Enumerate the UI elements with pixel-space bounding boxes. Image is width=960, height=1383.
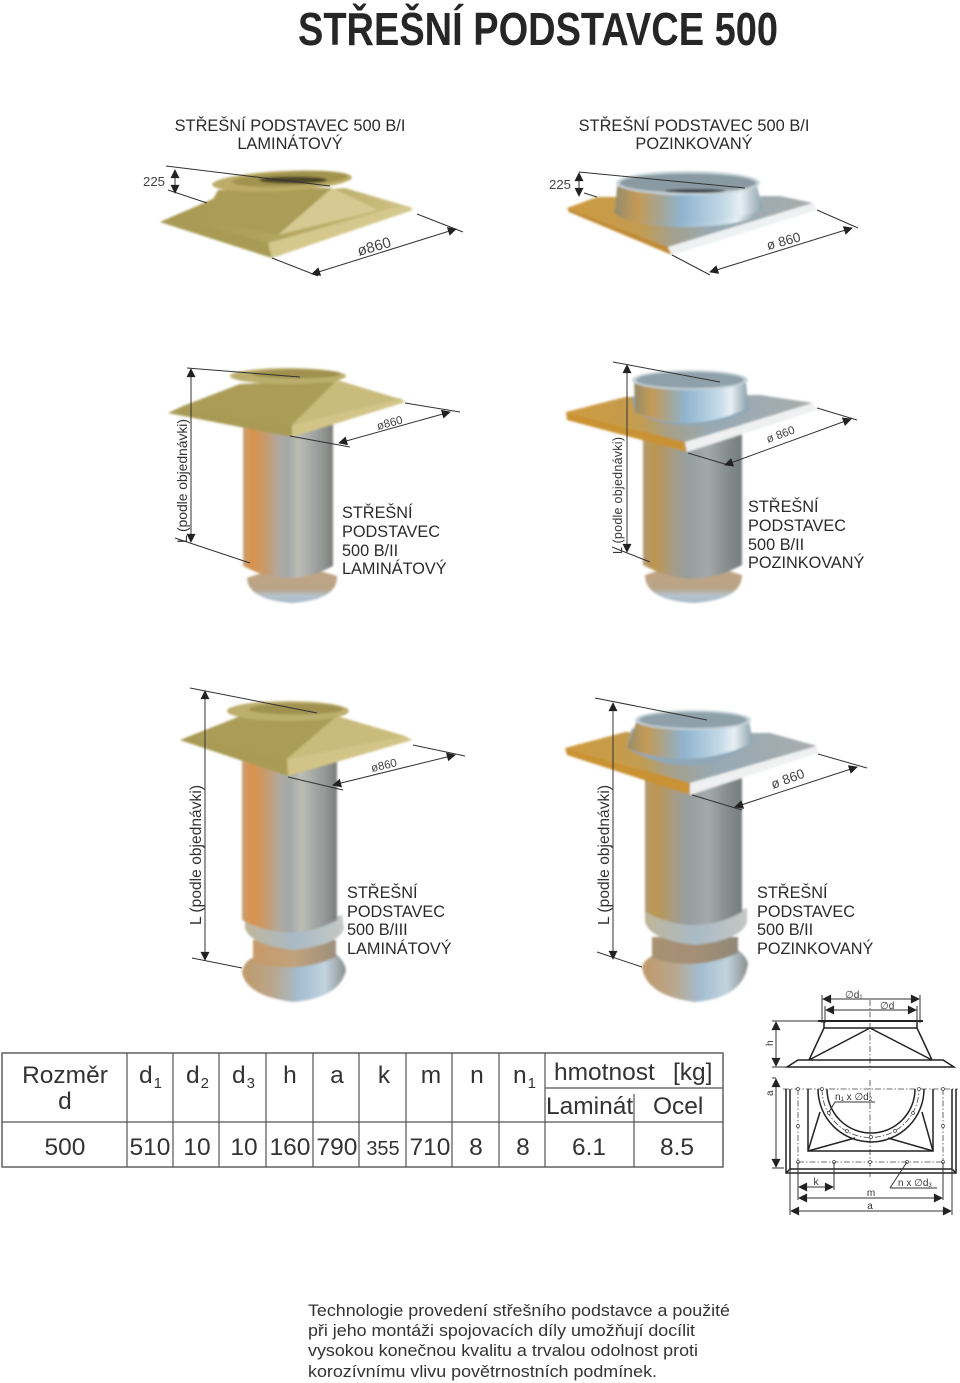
elevation view: ∅d [880, 1001, 894, 1012]
label: PODSTAVEC [757, 903, 855, 921]
dimension: 225: 225 [549, 177, 571, 192]
product: galvanized B/II with collar [565, 698, 874, 1002]
label [347, 883, 452, 958]
table data row: 10 [230, 1134, 258, 1161]
plan view: 2 [869, 1097, 873, 1103]
bottom dimensions: a [867, 1201, 873, 1212]
product: galvanized B/II [566, 362, 865, 603]
product: galvanized base B/I [549, 171, 858, 275]
subtitle: laminated B/I: LAMINÁTOVÝ [237, 134, 343, 153]
plan view: n [835, 1092, 841, 1103]
table data row: 790 [317, 1134, 357, 1161]
label: 500 B/II [748, 536, 804, 554]
bottom dimensions: k [814, 1177, 820, 1188]
dimension: 860: ø860 [355, 234, 393, 260]
label: 500 B/II [757, 921, 813, 939]
elevation view [765, 990, 954, 1070]
table header row: Ocel [653, 1093, 703, 1120]
description paragraph: při jeho montáži spojovacích díly umožňují docílit [308, 1321, 695, 1340]
label: PODSTAVEC [342, 523, 440, 541]
table header row: k [378, 1062, 391, 1089]
label [342, 503, 447, 578]
dimension: 225 [143, 166, 330, 203]
table data row: 710 [410, 1134, 450, 1161]
table header row: m [421, 1062, 441, 1089]
table header row: Rozměr [22, 1062, 108, 1089]
table data row: 10 [183, 1134, 211, 1161]
table header row: Laminát [546, 1093, 633, 1120]
dimension: 860 [290, 403, 460, 447]
table data row: 8 [516, 1134, 530, 1161]
dimension: L: L (podle objednávki) [596, 785, 613, 925]
dimension: 225 [549, 172, 745, 197]
table header row: d [139, 1062, 153, 1089]
bottom dimensions [790, 1162, 952, 1215]
label [748, 497, 865, 572]
dimension: 860: ø860 [376, 415, 404, 433]
label: 500 B/III [347, 921, 408, 939]
table header row: n [513, 1062, 527, 1089]
table header row: 1 [528, 1075, 536, 1092]
table data row [45, 1134, 694, 1161]
table header row: d [232, 1062, 246, 1089]
elevation view: ∅d [845, 990, 859, 1001]
description paragraph [308, 1301, 730, 1381]
elevation view: 1 [859, 995, 863, 1001]
bottom dimensions: m [867, 1188, 875, 1199]
table header row: [kg] [673, 1059, 712, 1086]
table data row: 6.1 [572, 1134, 606, 1161]
subtitle: laminated B/I: STŘEŠNÍ PODSTAVEC 500 B/I [175, 116, 405, 135]
dimension: 860 [692, 754, 867, 810]
table header row: d [58, 1088, 72, 1115]
dimension: 860 [272, 214, 463, 276]
dimension: 860 [288, 745, 465, 790]
dimension: L [174, 368, 300, 563]
label: POZINKOVANÝ [757, 939, 874, 958]
dimension: L [611, 362, 720, 562]
table header row: 1 [154, 1075, 162, 1092]
technical drawing [765, 990, 958, 1215]
dimension: 860: ø 860 [765, 424, 797, 446]
plan view: 1 [841, 1097, 845, 1103]
table header row: h [283, 1062, 297, 1089]
dimension: 225: 225 [143, 174, 165, 189]
description paragraph: vysokou konečnou kvalitu a trvalou odolnost proti [308, 1341, 698, 1360]
title: STŘEŠNÍ PODSTAVCE 500 [298, 3, 778, 55]
label: STŘEŠNÍ [748, 497, 819, 516]
subtitle: galvanized B/I [579, 116, 809, 153]
label: POZINKOVANÝ [748, 553, 865, 572]
elevation view: h [765, 1040, 776, 1046]
dimension: 860: ø 860 [769, 766, 806, 792]
table header row: d [186, 1062, 200, 1089]
label: PODSTAVEC [748, 517, 846, 535]
description paragraph: Technologie provedení střešního podstavce a použité [308, 1301, 730, 1320]
table header row [22, 1059, 712, 1120]
table data row: 510 [130, 1134, 170, 1161]
table header row: n [470, 1062, 484, 1089]
dimension: 860 [672, 210, 858, 275]
description paragraph: korozívnímu vlivu povětrnostních podmínek. [308, 1362, 657, 1381]
table header row: 2 [201, 1075, 209, 1092]
label [757, 883, 874, 958]
table header row: 3 [247, 1075, 255, 1092]
subtitle: galvanized B/I: STŘEŠNÍ PODSTAVEC 500 B/I [579, 116, 809, 135]
table header row: a [330, 1062, 344, 1089]
dimension: 860: ø860 [370, 757, 398, 775]
table data row: 160 [270, 1134, 310, 1161]
product: laminated base B/I [143, 166, 463, 276]
label: STŘEŠNÍ [757, 883, 828, 902]
table data row: 355 [366, 1138, 400, 1160]
dimension: L: L (podle objednávki) [611, 437, 625, 554]
label: STŘEŠNÍ [342, 503, 413, 522]
label: LAMINÁTOVÝ [347, 939, 452, 958]
bottom dimensions: n x ∅d [898, 1178, 928, 1189]
bottom dimensions: 3 [928, 1183, 932, 1189]
dimension: L [188, 688, 317, 968]
product: laminated B/II [168, 368, 460, 603]
dimension: 860: ø 860 [765, 229, 802, 253]
dimension: L: L (podle objednávki) [188, 785, 205, 925]
table data row: 8 [469, 1134, 483, 1161]
table header row: hmotnost [554, 1059, 655, 1086]
product: laminated B/III [180, 688, 465, 1002]
table data row: 500 [45, 1134, 85, 1161]
dimension table [2, 1053, 723, 1167]
label: PODSTAVEC [347, 903, 445, 921]
plan view: a [765, 1090, 776, 1096]
label: LAMINÁTOVÝ [342, 559, 447, 578]
dimension: 860 [688, 408, 857, 465]
subtitle: galvanized B/I: POZINKOVANÝ [635, 134, 753, 153]
plan view: x ∅d [844, 1092, 869, 1103]
table data row: 8.5 [660, 1134, 694, 1161]
dimension: L: L (podle objednávki) [174, 419, 190, 543]
label: STŘEŠNÍ [347, 883, 418, 902]
plan view [765, 1078, 958, 1177]
dimension: L [595, 698, 707, 967]
subtitle: laminated B/I [175, 116, 405, 153]
label: 500 B/II [342, 542, 398, 560]
